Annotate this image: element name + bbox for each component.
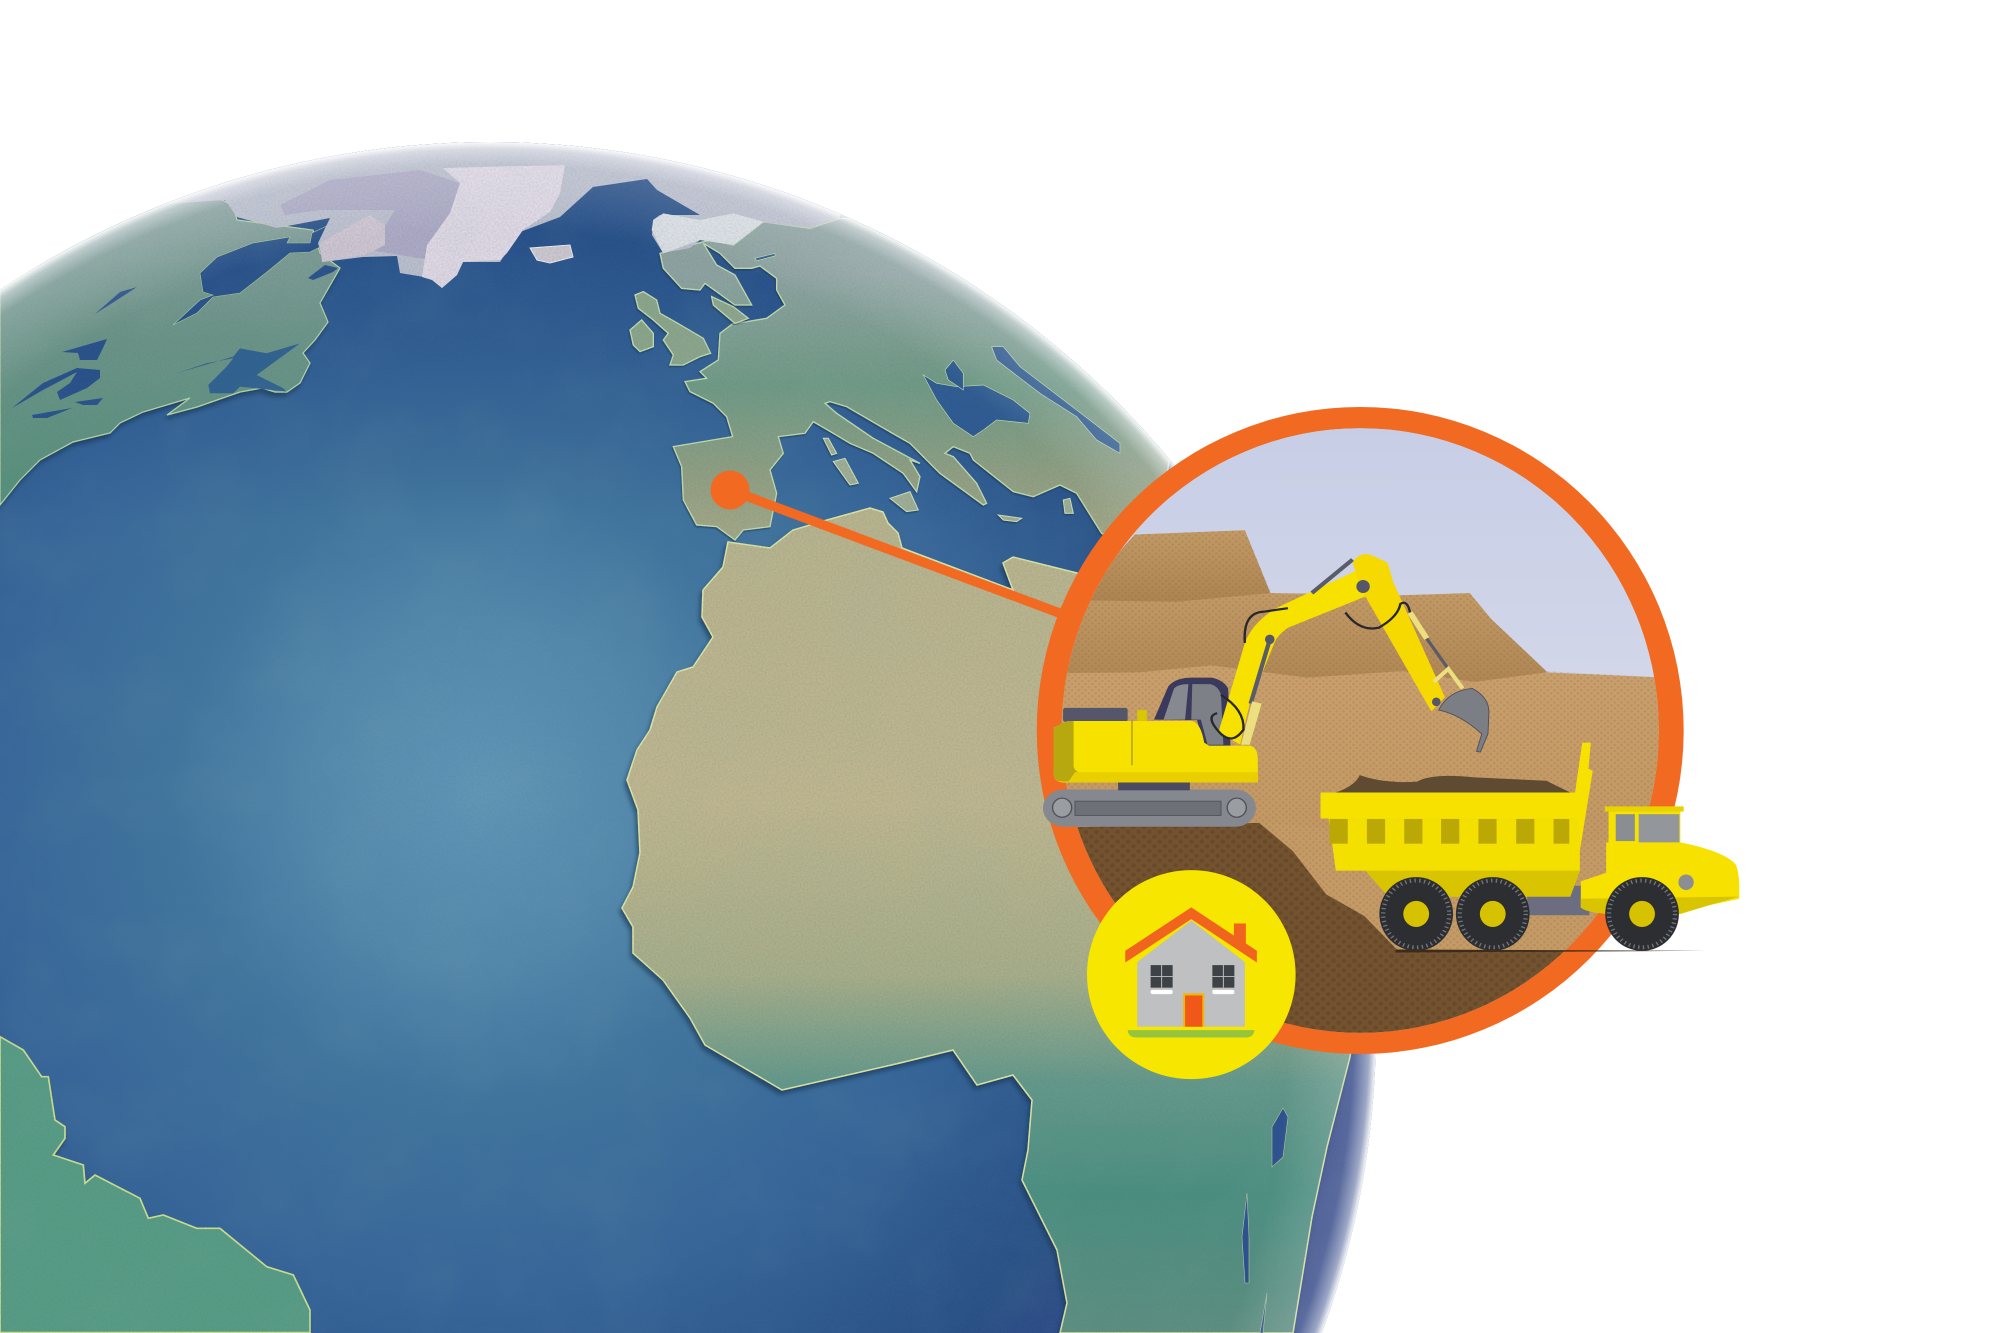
sky: [1062, 428, 1659, 1033]
truck load: [1336, 775, 1570, 792]
continent: North America: [0, 190, 340, 505]
truck wheels: [1379, 877, 1679, 951]
water: East African lakes: [1242, 1108, 1288, 1333]
truck chassis: [1527, 886, 1589, 915]
locator line: [730, 490, 1062, 614]
land: Greenland: [422, 165, 565, 288]
water: Hudson Bay: [172, 226, 326, 326]
excavator tracks: [1043, 789, 1256, 827]
yellow badge circle: [1087, 870, 1296, 1079]
locator line and dot: [710, 470, 1062, 614]
excavator boom: [1212, 560, 1374, 745]
truck bed: [1320, 743, 1593, 897]
land: Eurasia mainland: [660, 218, 1187, 557]
land: Scandinavian ice: [652, 213, 763, 253]
middle hill: [1049, 593, 1546, 704]
callout: quarry scene: [1020, 400, 1739, 1079]
badge: house: [1087, 870, 1296, 1079]
dump truck: [1320, 743, 1739, 953]
water: Canadian lakes: [12, 265, 338, 418]
water: inland seas: [755, 253, 1120, 453]
excavator: [1043, 554, 1489, 827]
ocean: [0, 130, 1400, 1333]
water: Gulf of St Lawrence: [177, 343, 300, 393]
land: Baffin tint: [320, 215, 385, 262]
land: Iceland: [530, 245, 573, 263]
continent: South America: [0, 1037, 310, 1333]
pit texture: [1068, 823, 1642, 1051]
pit: [1068, 823, 1642, 1051]
dirt texture: [1039, 530, 1680, 964]
land: Danish peninsula: [712, 297, 748, 323]
excavator bucket: [1439, 688, 1489, 752]
excavator body: [1053, 721, 1258, 790]
far hill: [1088, 530, 1270, 608]
excavator cab: [1063, 678, 1231, 747]
excavator arm: [1265, 554, 1463, 711]
scene background: [1062, 428, 1659, 1033]
locator dot: [710, 470, 750, 510]
paper texture: [0, 130, 1400, 1333]
land: UK and Ireland: [630, 292, 711, 365]
illustration: globe with mine callout: [0, 142, 1740, 1333]
land: Mediterranean islands: [823, 438, 1073, 522]
truck cab: [1581, 806, 1739, 914]
sky restored above hill line: [1039, 400, 1690, 678]
arctic ice: [165, 142, 840, 288]
house icon: [1125, 907, 1257, 1038]
ground shadow: [1396, 949, 1707, 953]
near slope: [1269, 823, 1666, 964]
continent: Europe and Asia: [630, 218, 1187, 557]
orange ring: [1037, 407, 1684, 1054]
ice: Canadian Arctic tint: [280, 170, 460, 260]
globe: [0, 120, 1400, 1333]
continent: Africa: [622, 508, 1400, 1333]
sphere rim haze: [0, 130, 1400, 1333]
front hill: [1039, 665, 1690, 1051]
